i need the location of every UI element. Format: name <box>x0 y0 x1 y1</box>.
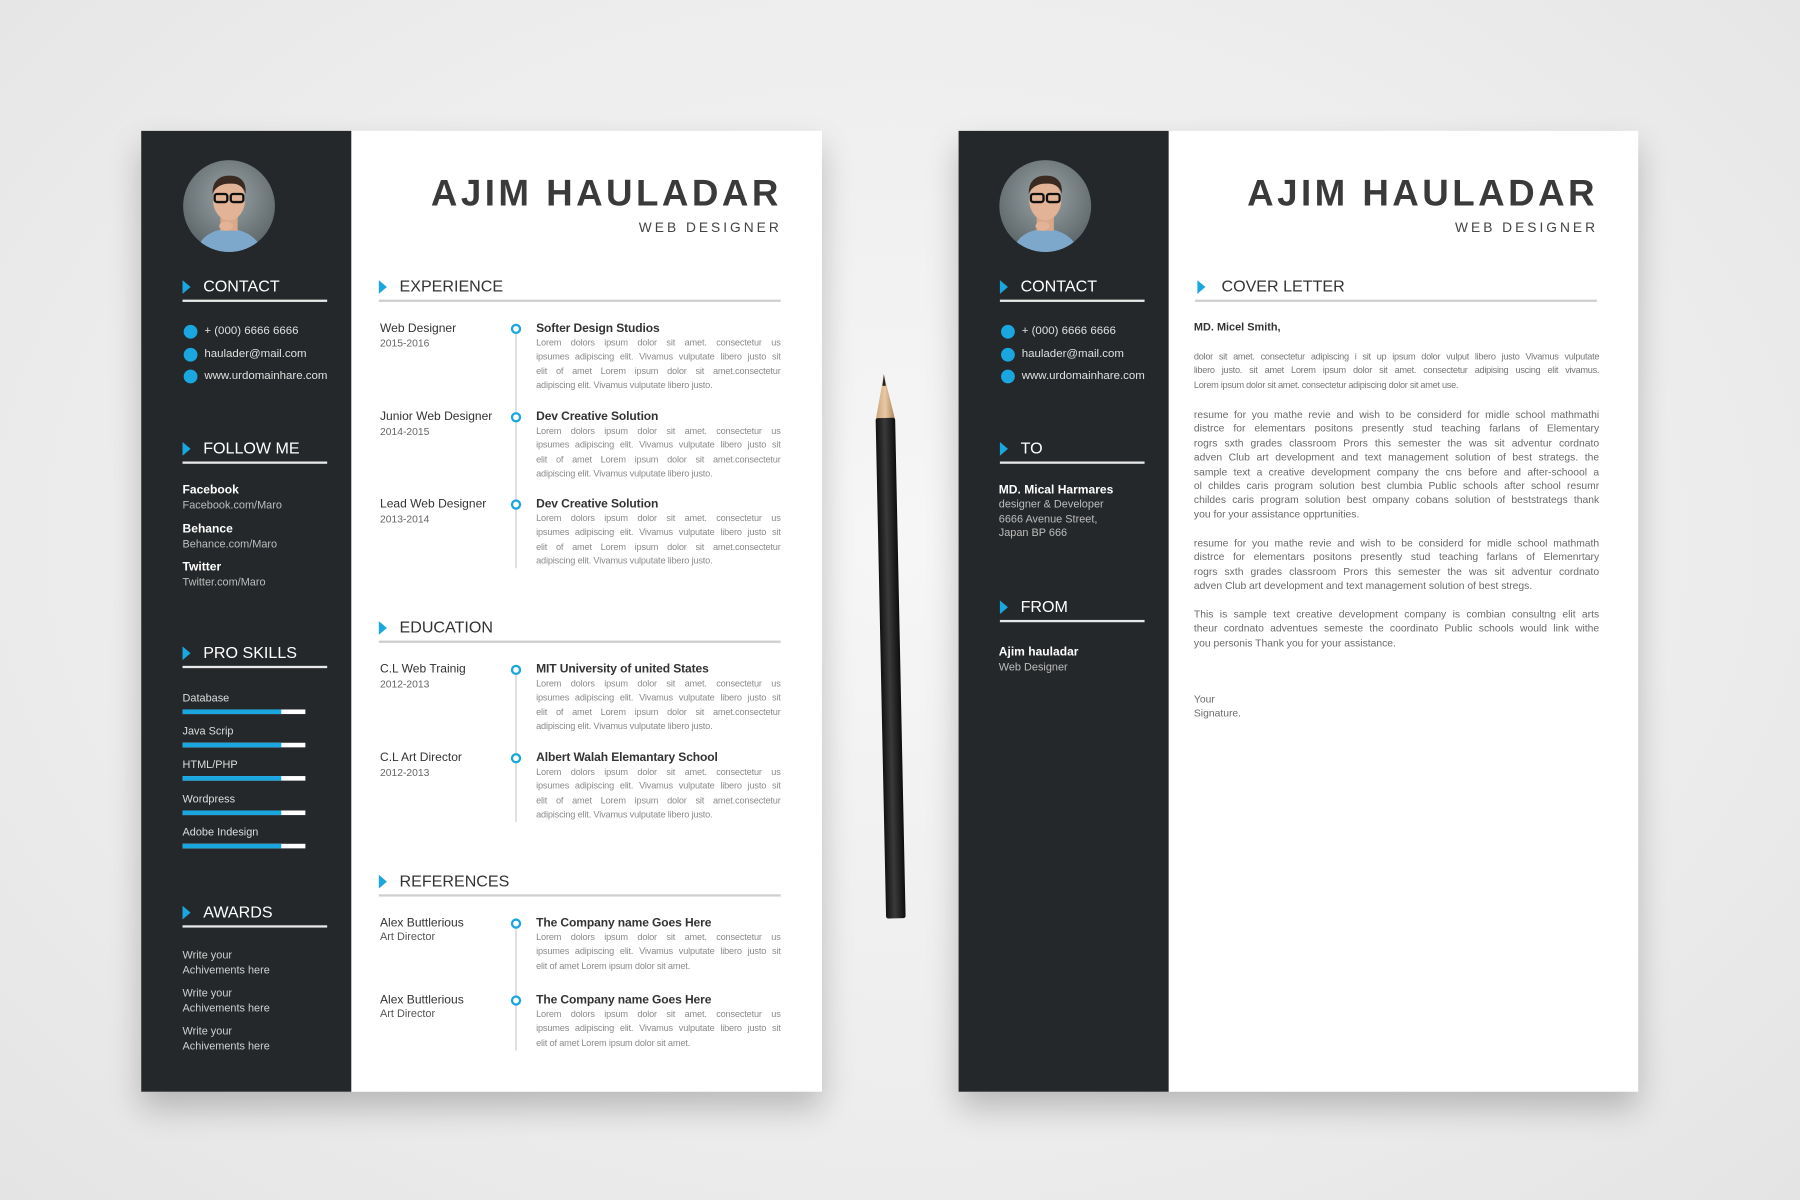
heading: experience <box>379 274 781 302</box>
heading: contact: CONTACT <box>203 277 280 295</box>
heading: pro skills <box>183 641 327 668</box>
contact list: www.urdomainhare.com <box>204 370 327 382</box>
entry: web training: elit of amet Lorem ipsum dolor sit amet.consectetur <box>536 707 781 717</box>
entry: lead web designer: 2013-2014 <box>380 513 429 525</box>
heading: to <box>1000 436 1145 464</box>
contact list <box>1001 324 1145 384</box>
entry: web designer: adipiscing elit. Vivamus vulputate libero justo. <box>536 380 712 391</box>
heading: contact: CONTACT <box>1021 277 1097 295</box>
page: cover letter <box>959 131 1638 1092</box>
entry: reference 1: ipsumes adipiscing elit. Vivamus vulputate libero justo sit <box>536 946 781 957</box>
entry: lead web designer: adipiscing elit. Vivamus vulputate libero justo. <box>536 556 712 566</box>
recipient: MD. Mical Harmares <box>999 483 1113 497</box>
entry: junior web designer: 2014-2015 <box>380 426 429 437</box>
letter body: rogrs sxth grades classroom Prors this semester the was sit adventur cordnato <box>1194 566 1599 577</box>
letter body: resume for you mathe revie and wish to be considerd for midle school mathmathi <box>1194 409 1599 420</box>
letter body: resume for you mathe revie and wish to be considerd for midle school mathmath <box>1194 537 1599 549</box>
awards list: Achivements here <box>183 964 270 977</box>
heading: cover letter: COVER LETTER <box>1221 277 1345 295</box>
heading: to: TO <box>1021 439 1043 457</box>
awards list: Write your <box>183 949 232 962</box>
entry: art director: C.L Art Director <box>380 751 462 765</box>
entry: web designer: Web Designer <box>380 321 456 335</box>
entry: junior web designer: Dev Creative Solution <box>536 410 658 424</box>
entry: web designer: Softer Design Studios <box>536 321 660 335</box>
heading: follow me: FOLLOW ME <box>203 439 300 457</box>
sidebar: cover letter <box>959 131 1169 1092</box>
entry: web training: ipsumes adipiscing elit. Vivamus vulputate libero justo sit <box>536 693 781 703</box>
letter body: sample text a creative development company the cns before and after-schoool a <box>1194 466 1599 477</box>
heading: from <box>1000 595 1145 622</box>
entry: junior web designer: Junior Web Designer <box>380 410 492 424</box>
entry: art director <box>380 751 781 820</box>
entry: lead web designer: Lead Web Designer <box>380 497 486 511</box>
letter body: theur cordnato adventues semeste the coordinato Public schools would link withe <box>1194 623 1599 634</box>
pencil <box>876 374 906 918</box>
entry: junior web designer: adipiscing elit. Vivamus vulputate libero justo. <box>536 469 712 479</box>
section: experience <box>378 277 781 568</box>
sender: Web Designer <box>999 661 1068 674</box>
entry: art director: adipiscing elit. Vivamus vulputate libero justo. <box>536 810 712 820</box>
heading: contact <box>183 274 327 302</box>
heading: education <box>379 615 781 643</box>
skill bars: Database <box>183 692 229 705</box>
social list: Facebook <box>183 483 239 497</box>
entry: lead web designer: ipsumes adipiscing elit. Vivamus vulputate libero justo sit <box>536 527 781 538</box>
entry: web training: adipiscing elit. Vivamus vulputate libero justo. <box>536 721 712 732</box>
entry: reference 1: Art Director <box>380 931 435 944</box>
skill bars <box>182 692 306 848</box>
entry: art director: ipsumes adipiscing elit. Vivamus vulputate libero justo sit <box>536 781 781 791</box>
social list: Behance.com/Maro <box>183 538 277 551</box>
entry: web training: C.L Web Trainig <box>380 662 466 676</box>
letter body <box>1194 321 1600 719</box>
letter body: MD. Micel Smith, <box>1194 321 1281 334</box>
entry: reference 1 <box>380 916 781 971</box>
skill bars: Wordpress <box>183 793 235 806</box>
letter body: adven Club art development and text management solution of best strategs. the <box>1194 451 1599 463</box>
name: AJIM HAULADAR <box>431 172 782 214</box>
heading: education: EDUCATION <box>400 618 493 636</box>
contact list: haulader@mail.com <box>1022 348 1124 360</box>
sender: Ajim hauladar <box>999 645 1078 659</box>
letter body: distrce for elementars positons presently stud teaching farlans of Elemenrtary <box>1194 552 1599 563</box>
letter body: Your <box>1194 693 1215 705</box>
letter body: This is sample text creative development company is combian consultng elit arts <box>1194 608 1599 620</box>
contact list: www.urdomainhare.com <box>1022 370 1145 382</box>
recipient: designer & Developer <box>999 498 1104 511</box>
letter body: childes caris program solution best ompany cobans solution of beststrategs thank <box>1194 494 1599 506</box>
skill bars: Adobe Indesign <box>183 827 258 839</box>
letter body: distrce for elementars positons presently stud teaching farlans of Elementary <box>1194 423 1599 434</box>
entry: reference 2 <box>380 993 781 1048</box>
heading: references: REFERENCES <box>400 871 509 890</box>
name: AJIM HAULADAR <box>1247 172 1598 214</box>
entry: junior web designer: elit of amet Lorem ipsum dolor sit amet.consectetur <box>536 454 781 465</box>
contact list <box>184 324 327 384</box>
letter body: adven Club art development and text management solution of best stregs. <box>1194 580 1532 591</box>
social list: Facebook.com/Maro <box>183 499 282 512</box>
contact list: haulader@mail.com <box>204 348 307 360</box>
entry: reference 2: Alex Buttlerious <box>380 993 464 1007</box>
page: resume <box>141 131 822 1092</box>
recipient: Japan BP 666 <box>999 527 1067 540</box>
recipient: 6666 Avenue Street, <box>999 513 1097 525</box>
entry: web designer: Lorem dolors ipsum dolor sit amet. consectetur us <box>536 338 781 348</box>
entry: reference 2: elit of amet Lorem ipsum dolor sit amet. <box>536 1038 690 1048</box>
heading: contact <box>1000 274 1145 302</box>
entry: reference 1: Lorem dolors ipsum dolor sit amet. consectetur us <box>536 932 781 943</box>
entry: reference 1: Alex Buttlerious <box>380 916 464 930</box>
entry: web training: Lorem dolors ipsum dolor sit amet. consectetur us <box>536 678 781 689</box>
section: references <box>378 871 781 1050</box>
contact list: + (000) 6666 6666 <box>1022 325 1116 338</box>
entry: web designer: elit of amet Lorem ipsum dolor sit amet.consectetur <box>536 366 781 376</box>
photo <box>183 160 275 252</box>
awards list: Achivements here <box>183 1002 270 1015</box>
entry: reference 2: Art Director <box>380 1008 435 1021</box>
social list <box>182 483 282 589</box>
entry: junior web designer: ipsumes adipiscing elit. Vivamus vulputate libero justo sit <box>536 440 781 450</box>
social list: Twitter.com/Maro <box>183 576 266 589</box>
entry: art director: Albert Walah Elemantary School <box>536 751 718 765</box>
entry: web training <box>380 662 781 732</box>
entry: lead web designer: elit of amet Lorem ipsum dolor sit amet.consectetur <box>536 542 781 552</box>
skill bars: HTML/PHP <box>183 759 238 771</box>
letter body: ol childes caris program solution best clumbia Public schools after school resumr <box>1194 480 1599 491</box>
heading: follow me <box>183 436 327 464</box>
entry: lead web designer: Lorem dolors ipsum dolor sit amet. consectetur us <box>536 513 781 523</box>
letter body: rogrs sxth grades classroom Prors this semester the was sit adventur cordnato <box>1194 437 1599 449</box>
awards list: Write your <box>183 987 232 1000</box>
heading: awards: AWARDS <box>203 902 273 921</box>
entry: reference 1: elit of amet Lorem ipsum dolor sit amet. <box>536 961 690 971</box>
sidebar: resume <box>141 131 351 1092</box>
entry: web designer: ipsumes adipiscing elit. Vivamus vulputate libero justo sit <box>536 352 781 362</box>
letter body: Signature. <box>1194 708 1241 719</box>
role: WEB DESIGNER <box>1455 219 1598 235</box>
entry: web designer: 2015-2016 <box>380 338 429 349</box>
heading: experience: EXPERIENCE <box>400 277 503 295</box>
entry: junior web designer: Lorem dolors ipsum dolor sit amet. consectetur us <box>536 426 781 436</box>
entry: reference 2: The Company name Goes Here <box>536 993 711 1007</box>
social list: Twitter <box>183 560 221 574</box>
entry: junior web designer <box>380 410 781 479</box>
entry: art director: 2012-2013 <box>380 767 429 778</box>
entry: web designer <box>380 321 781 391</box>
letter body: libero justo. sit amet Lorem ipsum dolor sit amet. consectetur adipising uscing elit vivamus. <box>1194 366 1599 376</box>
entry: art director: elit of amet Lorem ipsum dolor sit amet.consectetur <box>536 795 781 806</box>
section: education <box>378 618 781 822</box>
entry: web training: MIT University of united States <box>536 662 709 676</box>
heading: awards <box>183 900 327 928</box>
recipient <box>999 483 1113 540</box>
awards list: Achivements here <box>183 1040 270 1053</box>
social list: Behance <box>183 522 233 536</box>
heading: from: FROM <box>1021 597 1068 615</box>
skill bars: Java Scrip <box>183 726 233 738</box>
heading: pro skills: PRO SKILLS <box>203 643 297 661</box>
heading: references <box>379 869 781 897</box>
entry: art director: Lorem dolors ipsum dolor sit amet. consectetur us <box>536 767 781 777</box>
letter body: you personis Thank you for your assistance. <box>1194 637 1396 648</box>
heading: cover letter <box>1195 274 1597 302</box>
entry: reference 2: ipsumes adipiscing elit. Vivamus vulputate libero justo sit <box>536 1023 781 1034</box>
entry: lead web designer: Dev Creative Solution <box>536 497 658 511</box>
contact list: + (000) 6666 6666 <box>204 325 298 338</box>
awards list: Write your <box>183 1025 232 1038</box>
entry: web training: 2012-2013 <box>380 678 429 690</box>
awards list <box>182 949 270 1053</box>
entry: lead web designer <box>380 497 781 566</box>
entry: reference 2: Lorem dolors ipsum dolor sit amet. consectetur us <box>536 1009 781 1019</box>
letter body: you for your assistance opprtunities. <box>1194 508 1359 520</box>
role: WEB DESIGNER <box>639 219 782 235</box>
letter body: dolor sit amet. consectetur adipiscing i sit up ipsum dolor vulput libero justo Vivamus vulputate <box>1194 351 1599 362</box>
letter body: Lorem ipsum dolor sit amet. consectetur adipiscing dolor sit amet use. <box>1194 380 1458 390</box>
photo <box>999 160 1092 252</box>
entry: reference 1: The Company name Goes Here <box>536 916 711 930</box>
sender <box>998 645 1078 674</box>
